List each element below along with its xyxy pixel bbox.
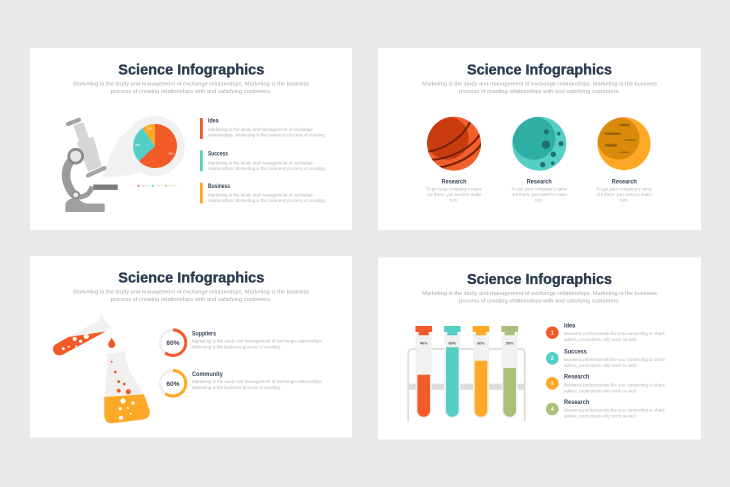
text block: research 2: Research (527, 179, 552, 185)
chart legend: Label 2 (155, 185, 164, 188)
chart legend: Label 3 (168, 185, 177, 188)
text block: research 3: out there, you need to make (597, 192, 652, 197)
list item 2: Success: Business professionals like you connecting to share (564, 357, 666, 362)
subtitle (422, 291, 657, 305)
list item 4: Research: advice, promotions only work as well. (564, 414, 637, 419)
panel: microscope pie chart (30, 48, 352, 230)
list item 4: Research: Research (564, 400, 590, 406)
list item 2: Success (546, 349, 666, 368)
text block: Community: Community (192, 372, 223, 378)
subtitle (73, 290, 309, 303)
panel: test tubes (378, 258, 701, 440)
text block: Business: relationships. Marketing is the business process of creating. (208, 198, 326, 203)
text block: Business: Marketing is the study and management of exchange (208, 192, 314, 197)
subtitle: process of creating relationships with and satisfying customers. (111, 89, 272, 95)
text block: Success: Success (208, 152, 229, 158)
chart legend: Label 1 (141, 185, 150, 188)
text block: Business (200, 183, 326, 204)
list item 1: Idea: Idea (564, 323, 576, 329)
text block: research 3 (596, 179, 653, 203)
text block: Idea: relationships. Marketing is the business process of creating. (208, 133, 326, 138)
pie chart: 13% (147, 128, 153, 130)
text block: Suppliers: Marketing is the business process of creating. (192, 344, 281, 349)
text block: research 1: To get your company's name (426, 187, 483, 192)
subtitle: Marketing is the study and management of exchange relationships. Marketing is the business (422, 82, 657, 88)
title: Science Infographics (467, 271, 612, 288)
list item 1: Idea (546, 323, 666, 342)
text block: research 2: out there, you need to make (512, 192, 567, 197)
tube: 50%: 50% (506, 342, 514, 346)
list item 4: Research (546, 400, 666, 419)
pie chart (133, 124, 177, 168)
subtitle (73, 82, 309, 95)
text block: Suppliers: Suppliers (192, 332, 217, 338)
icon: teal planet (512, 117, 566, 171)
tube: 60% (473, 326, 489, 418)
icon: yellow planet (597, 117, 650, 170)
icon: microscope (65, 116, 185, 212)
tube: 50% (501, 326, 518, 418)
list item 3: Research (546, 375, 666, 393)
tube: 80%: 80% (448, 342, 457, 346)
subtitle: process of creating relationships with and satisfying customers. (459, 89, 620, 95)
text block: research 3: sure. (620, 198, 629, 203)
list item 3: Research: Research (564, 375, 590, 381)
icon: flask (104, 351, 150, 423)
text block: Idea (200, 118, 326, 139)
list item 2: Success: 2 (551, 356, 554, 362)
list item 3: Research: Business professionals like you connecting to share (564, 382, 666, 387)
donut: Community 60%: 60% (166, 381, 180, 388)
list item 3: Research: advice, promotions only work as well. (564, 388, 637, 393)
pie chart: 62% (168, 152, 174, 156)
tube: 80% (444, 326, 461, 418)
list item 2: Success: advice, promotions only work as well. (564, 363, 637, 368)
text block: research 3: Research (612, 179, 637, 185)
tube: 40% (415, 326, 432, 418)
donut: Suppliers 60%: 60% (166, 340, 180, 347)
donut: Suppliers 60% (160, 330, 186, 356)
text block: research 3: To get your company's name (596, 187, 653, 192)
text block: research 1: sure. (450, 198, 458, 203)
panel: planets (378, 48, 701, 230)
list item 1: Idea: Business professionals like you connecting to share (564, 331, 666, 336)
title: Science Infographics (118, 269, 264, 286)
list item 1: Idea: 1 (551, 331, 554, 337)
text block: research 1 (426, 179, 483, 203)
chart legend (138, 185, 177, 188)
subtitle: Marketing is the study and management of exchange relationships. Marketing is the business (422, 291, 657, 297)
text block: research 1: Research (442, 179, 467, 185)
title: Science Infographics (467, 62, 612, 78)
text block: research 1: out there, you need to make (426, 192, 482, 197)
text block: Community (192, 372, 323, 390)
icon: drop (108, 338, 115, 348)
icon: test tube pouring (53, 316, 112, 355)
donut: Community 60% (160, 370, 186, 396)
text block: Suppliers: Marketing is the study and management of exchange relationships. (192, 338, 323, 343)
tube: 60%: 60% (477, 342, 485, 346)
chart: tube rack (408, 349, 525, 421)
text block: Idea: Marketing is the study and management of exchange (208, 127, 314, 132)
text block: Success: relationships. Marketing is the business process of creating. (208, 166, 326, 171)
list item 1: Idea: advice, promotions only work as well. (564, 337, 637, 342)
text block: Success (200, 150, 326, 171)
text block: Success: Marketing is the study and management of exchange (208, 160, 314, 165)
list item 2: Success: Success (564, 349, 587, 355)
text block: Business: Business (208, 184, 231, 190)
text block: research 2 (511, 179, 568, 203)
subtitle (422, 82, 657, 95)
subtitle: Marketing is the study and management of exchange relationships. Marketing is the business (73, 290, 309, 296)
text block: research 2: sure. (535, 198, 544, 203)
text block: Suppliers (192, 332, 323, 349)
text block: Community: Marketing is the business process of creating. (192, 385, 281, 390)
subtitle: process of creating relationships with and satisfying customers. (459, 299, 620, 305)
panel: flask and donuts (30, 256, 352, 438)
list item 4: Research: Business professionals like you connecting to share (564, 408, 666, 413)
list item 3: Research: 3 (551, 381, 554, 387)
pie chart: 25% (135, 144, 141, 147)
text block: Idea: Idea (208, 118, 219, 124)
tube: 40%: 40% (420, 342, 428, 346)
list item 4: Research: 4 (551, 407, 554, 413)
text block: research 2: To get your company's name (511, 187, 568, 192)
text block: Community: Marketing is the study and management of exchange relationships. (192, 379, 323, 384)
title: Science Infographics (118, 62, 264, 78)
subtitle: process of creating relationships with and satisfying customers. (111, 297, 272, 303)
icon: red planet (426, 117, 482, 171)
subtitle: Marketing is the study and management of exchange relationships. Marketing is the business (73, 82, 309, 88)
